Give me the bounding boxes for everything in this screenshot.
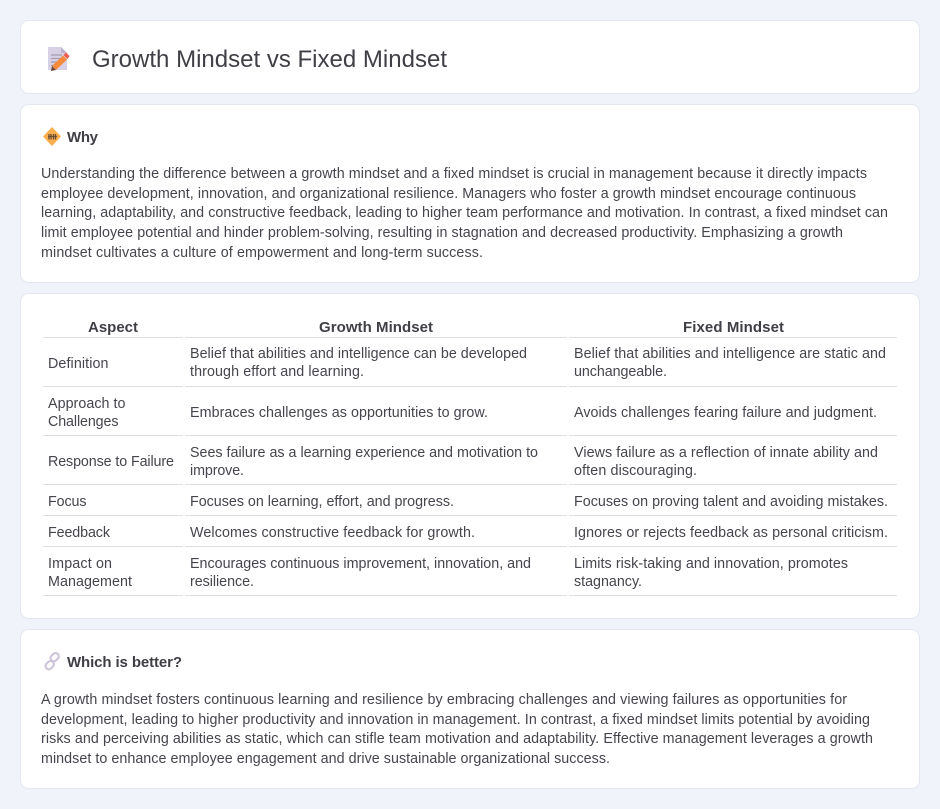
table row: definition: through effort and learning. — [190, 364, 364, 380]
table row: impact on management: Impact on — [48, 556, 112, 572]
table row: response to failure: improve. — [190, 463, 244, 479]
text block: verdict: mindset to enhance employee engagement and drive sustainable organizational success. — [41, 751, 610, 767]
icon: memo with pencil — [48, 47, 70, 71]
table row: feedback — [43, 525, 897, 546]
panel: why — [20, 104, 920, 282]
table row: feedback: Feedback — [48, 525, 111, 541]
text block: why explanation: limit employee potential and hinder problem-solving, resulting in stagnation and decreased productivity. Emphasizing a growth — [41, 225, 843, 241]
table row: definition: Definition — [48, 356, 109, 372]
table row: feedback: Ignores or rejects feedback as personal criticism. — [574, 525, 888, 541]
table row: response to failure — [43, 445, 897, 484]
table row: definition: unchangeable. — [574, 364, 667, 380]
table row: impact on management: Management — [48, 574, 132, 590]
table row: response to failure: often discouraging. — [574, 463, 697, 479]
table row: impact on management: stagnancy. — [574, 574, 642, 590]
icon: diamond sign — [44, 128, 60, 145]
table row: focus: Focuses on proving talent and avoiding mistakes. — [574, 494, 888, 510]
table row: definition: Belief that abilities and intelligence can be developed — [190, 346, 527, 362]
table row: impact on management: Limits risk-taking and innovation, promotes — [574, 556, 848, 572]
table header: Fixed Mindset — [683, 319, 784, 336]
table row: response to failure: Views failure as a reflection of innate ability and — [574, 445, 878, 461]
table row: approach to challenges: Challenges — [48, 414, 118, 430]
table row: feedback: Welcomes constructive feedback for growth. — [190, 525, 475, 541]
icon: link — [44, 652, 60, 671]
heading: why: Why — [67, 129, 99, 146]
text block: why explanation: learning, adaptability, and constructive feedback, leading to higher team performance and motivation. In contrast, a fixed mindset can — [41, 205, 888, 221]
table header — [43, 319, 897, 338]
panel: title header — [20, 20, 920, 94]
table row: approach to challenges: Approach to — [48, 396, 126, 412]
text block: why explanation: Understanding the difference between a growth mindset and a fixed mindset is crucial in management because it directly impacts — [41, 166, 867, 182]
text block: verdict — [41, 692, 873, 767]
table row: response to failure: Sees failure as a learning experience and motivation to — [190, 445, 538, 461]
table row: approach to challenges — [43, 396, 897, 436]
text block: why explanation: mindset cultivates a culture of empowerment and long-term success. — [41, 245, 483, 261]
heading: which is better: Which is better? — [67, 654, 182, 671]
title: Growth Mindset vs Fixed Mindset — [92, 46, 447, 73]
text block: verdict: A growth mindset fosters continuous learning and resilience by embracing challenges and viewing failures as opportunities for — [41, 692, 847, 708]
table header: Growth Mindset — [319, 319, 433, 336]
table row: approach to challenges: Embraces challenges as opportunities to grow. — [190, 405, 488, 421]
text block: verdict: risks and perceiving abilities as static, which can stifle team motivation and adaptability. Effective management leverages a growth — [41, 731, 873, 747]
table row: impact on management: resilience. — [190, 574, 254, 590]
text block: why explanation: employee development, innovation, and organizational resilience. Managers who foster a growth mindset encourage continuous — [41, 186, 856, 202]
text block: verdict: development, leading to higher productivity and innovation in management. In contrast, a fixed mindset limits potential by avoiding — [41, 712, 870, 728]
table row: definition — [43, 346, 897, 386]
table row: response to failure: Response to Failure — [48, 454, 174, 470]
table row: focus: Focus — [48, 494, 86, 510]
table row: impact on management: Encourages continuous improvement, innovation, and — [190, 556, 531, 572]
text block: why explanation — [41, 166, 888, 261]
table row: focus — [43, 494, 897, 516]
table row: focus: Focuses on learning, effort, and progress. — [190, 494, 454, 510]
table row: definition: Belief that abilities and intelligence are static and — [574, 346, 886, 362]
table header: Aspect — [88, 319, 138, 336]
table row: approach to challenges: Avoids challenges fearing failure and judgment. — [574, 405, 877, 421]
table row: impact on management — [43, 556, 897, 596]
panel: comparison table — [20, 294, 920, 618]
panel: which is better — [20, 630, 920, 788]
